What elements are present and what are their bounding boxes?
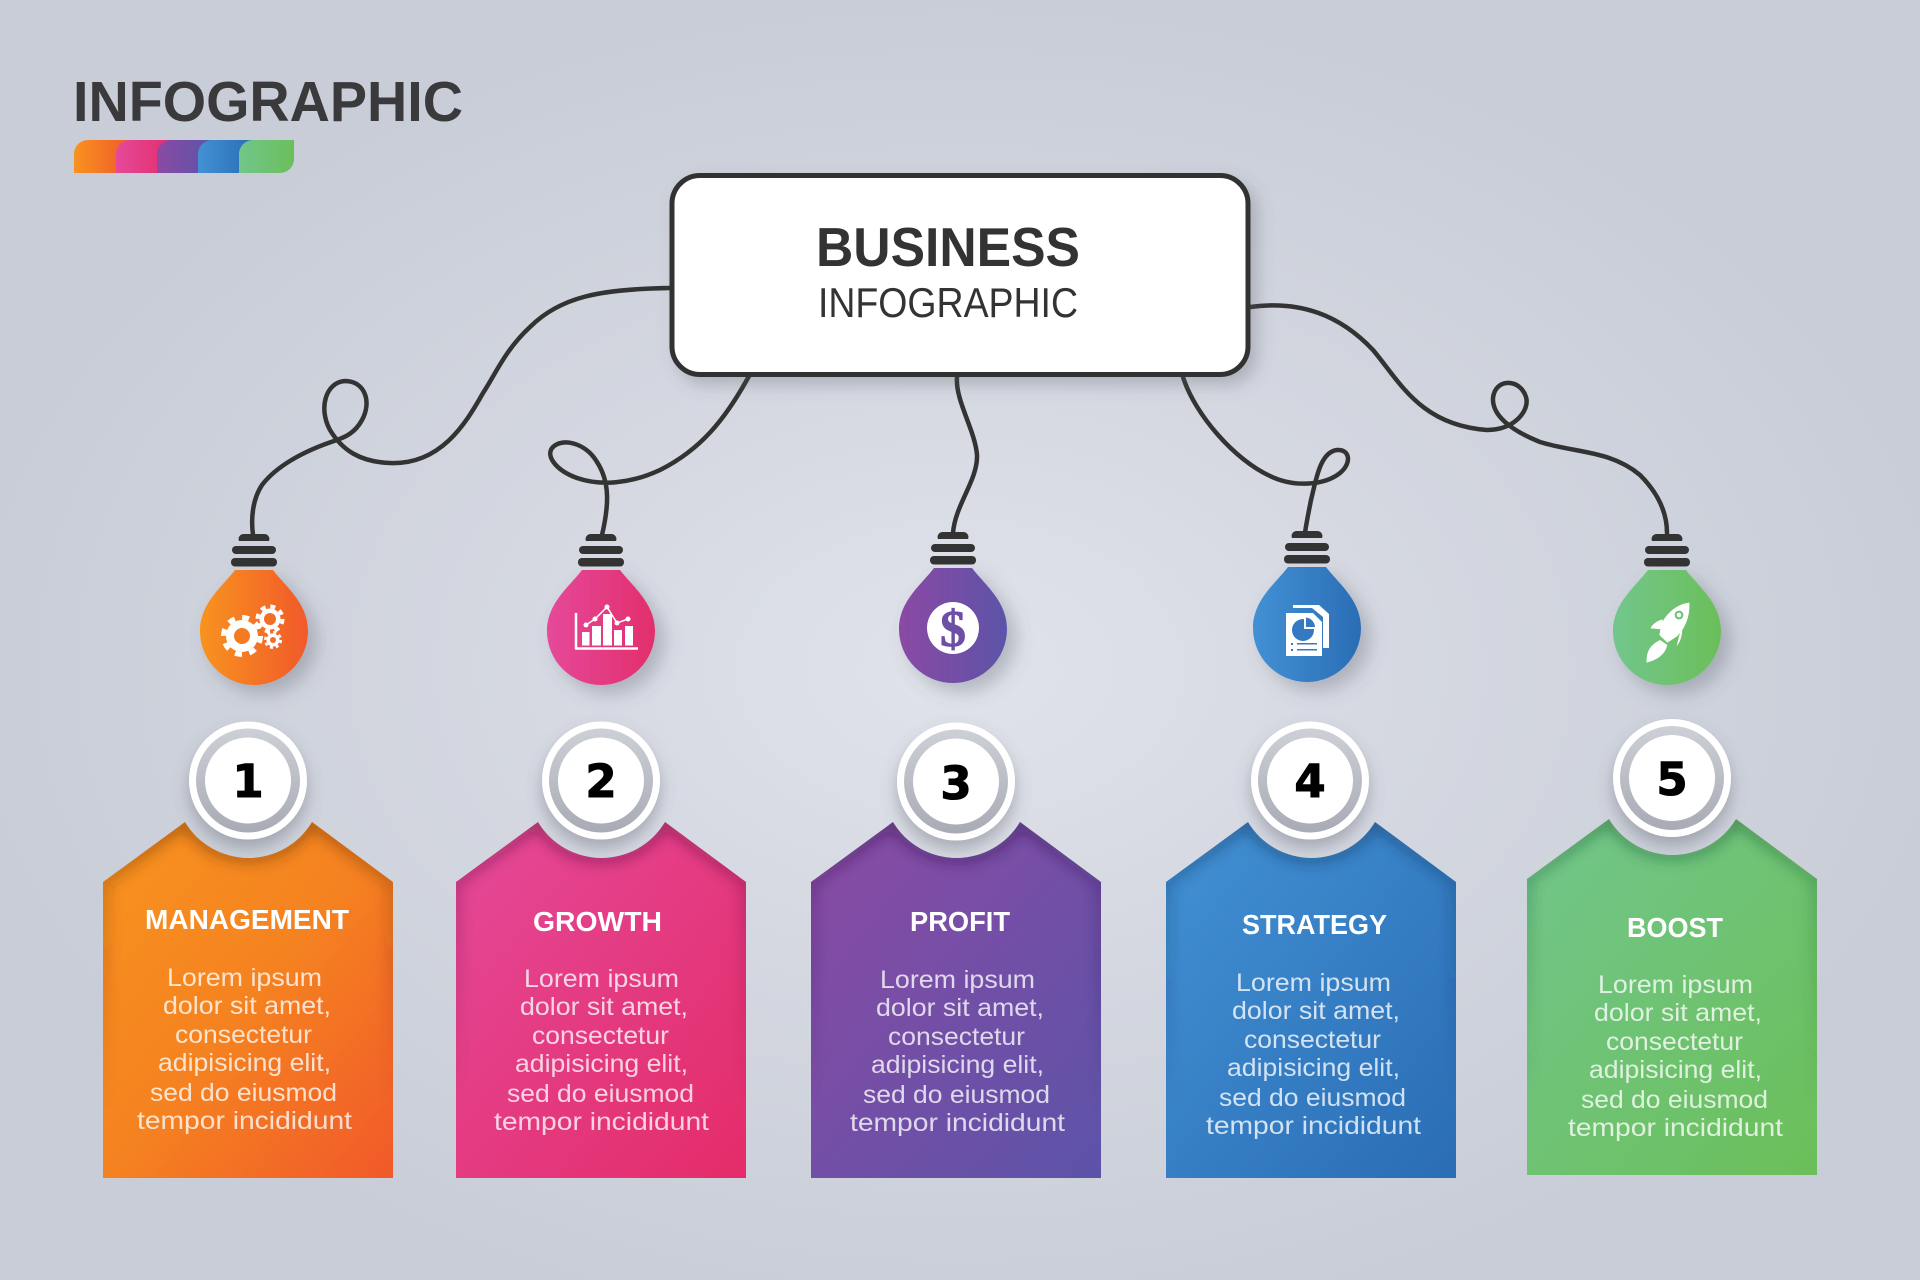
- wires connecting the central box to the bulbs: [252, 288, 1667, 535]
- panel 4: strategy: dolor sit amet,: [1232, 997, 1400, 1025]
- panel 2: growth: Lorem ipsum: [524, 965, 679, 993]
- panel 3: profit: Lorem ipsum: [880, 966, 1035, 994]
- page title: INFOGRAPHIC: INFOGRAPHIC: [73, 70, 463, 134]
- bulb 1 with gears icon: [200, 534, 308, 685]
- panel 4: strategy: STRATEGY: [1242, 909, 1387, 940]
- panel 5: boost: Lorem ipsum: [1598, 971, 1753, 999]
- panel 3: profit: sed do eiusmod: [863, 1081, 1050, 1109]
- number badge 4: [1251, 722, 1369, 840]
- panel 2: growth: consectetur: [532, 1022, 669, 1050]
- panel 3: profit: adipisicing elit,: [871, 1051, 1044, 1079]
- number badge 2: 2: [585, 755, 617, 808]
- panel 5: boost: adipisicing elit,: [1589, 1056, 1762, 1084]
- panel 3: profit: dolor sit amet,: [876, 994, 1044, 1022]
- panel 2: growth: tempor incididunt: [494, 1108, 709, 1136]
- panel 1: management: dolor sit amet,: [163, 992, 331, 1020]
- panel 2: growth: dolor sit amet,: [520, 993, 688, 1021]
- panel 1: management: sed do eiusmod: [150, 1079, 337, 1107]
- rainbow colour bar: [74, 140, 294, 173]
- number badge 2: [542, 722, 660, 840]
- number badge 3: [897, 722, 1015, 840]
- panel 3: profit: [811, 822, 1101, 1178]
- panel 1: management: adipisicing elit,: [158, 1049, 331, 1077]
- number badge 5: [1613, 719, 1731, 837]
- panel 4: strategy: adipisicing elit,: [1227, 1054, 1400, 1082]
- panel 1: management: consectetur: [175, 1021, 312, 1049]
- panel 2: growth: adipisicing elit,: [515, 1050, 688, 1078]
- central title box: INFOGRAPHIC: [818, 279, 1078, 326]
- panel 5: boost: BOOST: [1627, 912, 1723, 943]
- panel 3: profit: consectetur: [888, 1023, 1025, 1051]
- panel 1: management: Lorem ipsum: [167, 964, 322, 992]
- bulb 3 with dollar icon: $: [940, 601, 966, 658]
- number badge 3: 3: [940, 757, 972, 810]
- panel 5: boost: consectetur: [1606, 1028, 1743, 1056]
- panel 2: growth: GROWTH: [533, 906, 662, 937]
- panel 1: management: MANAGEMENT: [145, 904, 349, 935]
- panel 2: growth: [456, 822, 746, 1178]
- bulb 2 with bar chart icon: [547, 534, 655, 685]
- panel 4: strategy: [1166, 822, 1456, 1178]
- number badge 4: 4: [1294, 755, 1326, 808]
- number badge 5: 5: [1656, 753, 1688, 806]
- panel 5: boost: sed do eiusmod: [1581, 1086, 1768, 1114]
- panel 3: profit: PROFIT: [910, 906, 1010, 937]
- infographic canvas: [74, 82, 1817, 1178]
- central title box: BUSINESS: [816, 216, 1080, 278]
- panel 1: management: tempor incididunt: [137, 1107, 352, 1135]
- panel 5: boost: dolor sit amet,: [1594, 999, 1762, 1027]
- number badge 1: [189, 722, 307, 840]
- number badge 1: 1: [232, 755, 264, 808]
- bulb 5 with rocket icon: [1613, 534, 1721, 685]
- panel 5: boost: [1527, 819, 1817, 1175]
- panel 3: profit: tempor incididunt: [850, 1109, 1065, 1137]
- panel 4: strategy: tempor incididunt: [1206, 1112, 1421, 1140]
- panel 5: boost: tempor incididunt: [1568, 1114, 1783, 1142]
- panel 4: strategy: Lorem ipsum: [1236, 969, 1391, 997]
- bulb 4 with document icon: [1253, 531, 1361, 682]
- panel 2: growth: sed do eiusmod: [507, 1080, 694, 1108]
- central title box: [672, 176, 1248, 374]
- panel 1: management: [103, 822, 393, 1178]
- panel 4: strategy: consectetur: [1244, 1026, 1381, 1054]
- panel 4: strategy: sed do eiusmod: [1219, 1084, 1406, 1112]
- bulb 3 with dollar icon: [899, 532, 1007, 683]
